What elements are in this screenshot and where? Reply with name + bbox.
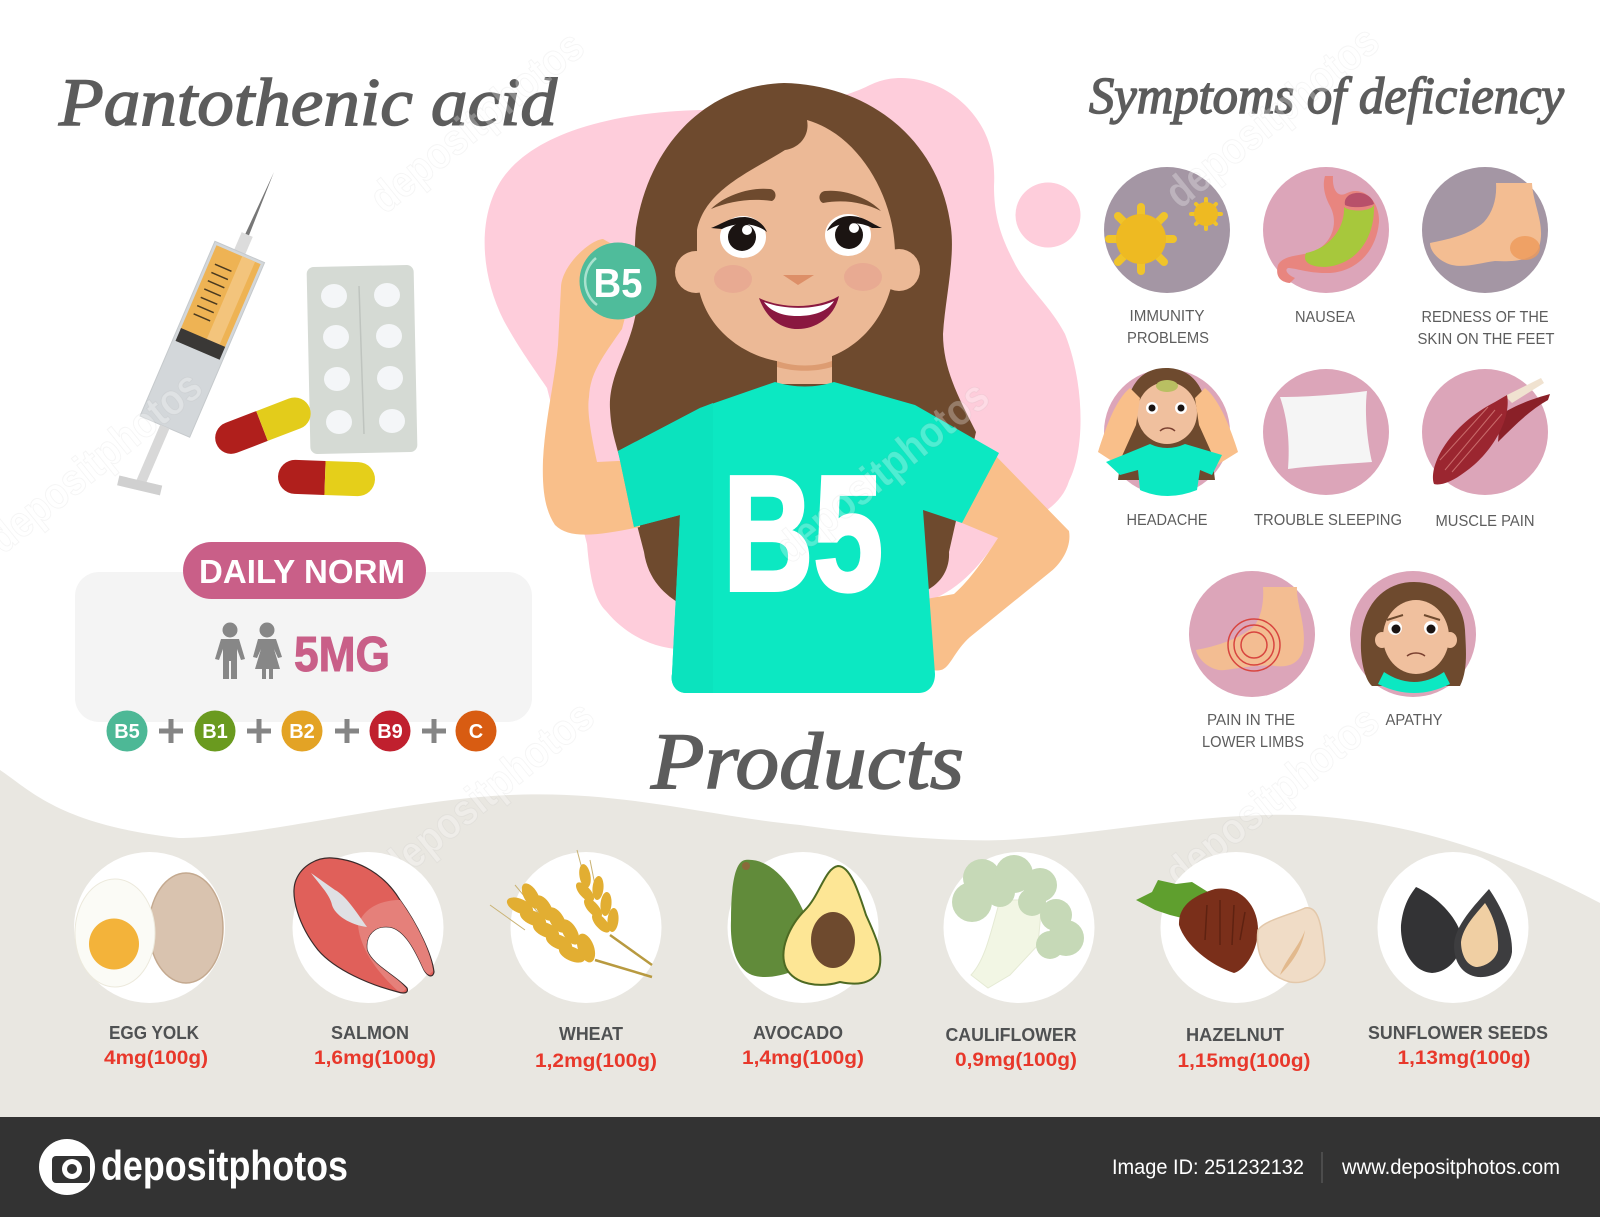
illustration: blister pack	[307, 265, 417, 454]
hair	[610, 83, 976, 605]
cheeks	[714, 265, 752, 293]
watermarks: depositphotos	[765, 371, 998, 573]
icon: man and woman	[215, 622, 282, 679]
product: cauliflower: 0,9mg(100g)	[955, 1050, 1077, 1071]
heading: Products: Products	[650, 718, 964, 806]
heading: Symptoms of deficiency: Symptoms of deficiency	[1089, 68, 1565, 125]
product: avocado	[728, 852, 880, 1069]
footer bar	[0, 1117, 1600, 1217]
product: egg yolk: EGG YOLK	[109, 1023, 199, 1043]
symptom: pain in the lower limbs: LOWER LIMBS	[1202, 734, 1304, 751]
vitamin combination row	[106, 710, 496, 752]
nose	[783, 275, 814, 285]
face	[697, 120, 895, 363]
watermarks: depositphotos	[1155, 696, 1388, 898]
footer image id: Image ID: 251232132	[1112, 1156, 1304, 1179]
title: Pantothenic acid: Pantothenic acid	[58, 64, 558, 140]
footer logo	[39, 1139, 348, 1195]
illustration: capsule two	[277, 459, 376, 497]
vitamin ball	[580, 242, 656, 320]
left arm	[543, 239, 640, 535]
pink blob background	[485, 78, 1081, 649]
product: cauliflower: CAULIFLOWER	[946, 1025, 1076, 1045]
shirt label: B5	[723, 442, 883, 625]
product: wheat	[490, 850, 662, 1072]
watermarks	[0, 16, 1388, 898]
symptom: immunity problems: PROBLEMS	[1127, 330, 1209, 347]
product: salmon	[292, 852, 444, 1069]
product: sunflower seeds	[1368, 852, 1548, 1069]
product: salmon: 1,6mg(100g)	[314, 1048, 436, 1069]
product: salmon: SALMON	[331, 1023, 409, 1043]
vitamin combination row: B2	[289, 721, 315, 743]
t-shirt	[618, 382, 999, 693]
vitamin combination row: B1	[202, 721, 228, 743]
product: hazelnut: HAZELNUT	[1186, 1025, 1284, 1045]
neck	[777, 350, 832, 384]
products background wave	[0, 770, 1600, 1117]
vitamin combination row: B9	[377, 721, 403, 743]
footer logo: depositphotos	[101, 1142, 348, 1189]
decorative pink circle	[1016, 182, 1080, 248]
illustration: girl holding B5 vitamin	[543, 83, 1069, 693]
symptom: muscle pain	[1422, 369, 1550, 530]
footer url: www.depositphotos.com	[1341, 1156, 1560, 1179]
symptom: pain in the lower limbs	[1189, 571, 1315, 751]
watermarks: depositphotos	[370, 691, 603, 893]
daily norm pill heading	[183, 542, 426, 599]
symptom: trouble sleeping	[1254, 369, 1402, 529]
eyes	[720, 216, 766, 258]
product: hazelnut: 1,15mg(100g)	[1178, 1051, 1310, 1072]
symptom: redness of the skin on the feet: SKIN ON THE FEET	[1418, 331, 1555, 348]
watermarks: depositphotos	[360, 21, 593, 223]
symptom: redness of the skin on the feet	[1418, 167, 1555, 348]
product: sunflower seeds: 1,13mg(100g)	[1398, 1048, 1530, 1069]
daily norm value: 5MG	[294, 628, 390, 682]
illustration: syringe	[111, 161, 299, 504]
ears	[675, 251, 717, 293]
mouth	[759, 296, 839, 329]
product: sunflower seeds: SUNFLOWER SEEDS	[1368, 1023, 1548, 1043]
daily norm panel	[75, 572, 532, 722]
symptom: headache	[1098, 368, 1238, 529]
right arm	[909, 450, 1069, 671]
product: cauliflower	[944, 852, 1094, 1071]
product: avocado: 1,4mg(100g)	[742, 1048, 864, 1069]
symptom: apathy	[1350, 571, 1476, 729]
daily norm pill heading: DAILY NORM	[199, 553, 405, 590]
symptom: nausea	[1263, 167, 1389, 326]
product: egg yolk	[74, 852, 225, 1069]
symptom: trouble sleeping: TROUBLE SLEEPING	[1254, 512, 1402, 529]
symptom: headache: HEADACHE	[1126, 512, 1208, 529]
vitamin combination row: C	[469, 721, 483, 743]
symptom: immunity problems: IMMUNITY	[1130, 308, 1205, 325]
symptom: pain in the lower limbs: PAIN IN THE	[1207, 712, 1295, 729]
illustration: capsule one	[211, 393, 315, 458]
symptom: redness of the skin on the feet: REDNESS OF THE	[1422, 309, 1548, 326]
product: avocado: AVOCADO	[753, 1023, 843, 1043]
product: wheat: 1,2mg(100g)	[535, 1051, 657, 1072]
product: egg yolk: 4mg(100g)	[104, 1048, 208, 1069]
product: hazelnut	[1136, 852, 1325, 1072]
product: wheat: WHEAT	[559, 1024, 623, 1044]
eyebrows	[711, 189, 776, 209]
symptom: apathy: APATHY	[1386, 712, 1443, 729]
vitamin combination row: B5	[114, 721, 140, 743]
symptom: nausea: NAUSEA	[1295, 309, 1355, 326]
symptom: immunity problems	[1104, 167, 1230, 347]
symptom: muscle pain: MUSCLE PAIN	[1436, 513, 1534, 530]
illustration: girl holding B5 vitamin: B5	[594, 260, 642, 306]
